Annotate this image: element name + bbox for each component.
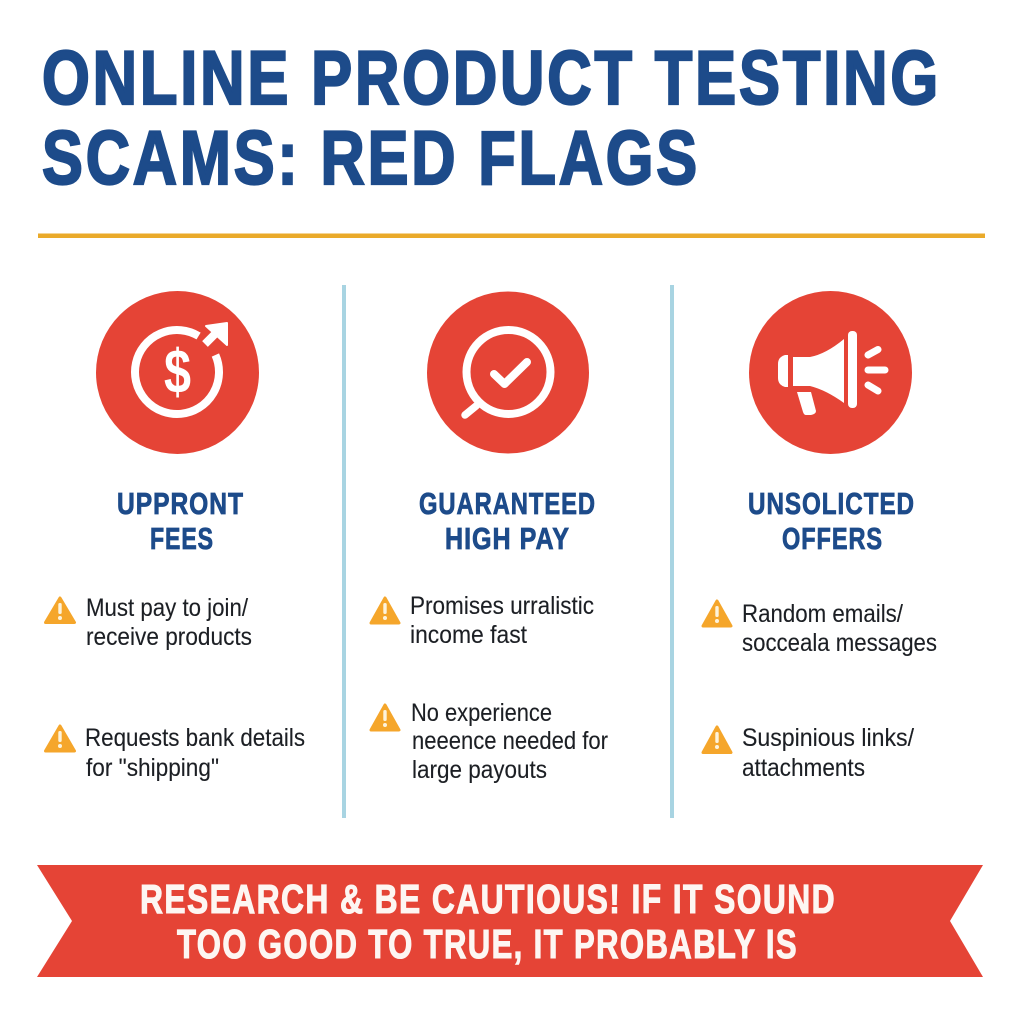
icon: megaphone <box>749 291 912 454</box>
warning item: no experience: neeence needed for <box>412 727 608 755</box>
warning item: no experience: large payouts <box>412 756 547 784</box>
warning item: must pay <box>46 594 252 651</box>
icon: dollar with growth arrow: $ <box>164 338 191 407</box>
panel: guaranteed high pay <box>371 292 608 784</box>
icon: dollar with growth arrow <box>96 291 259 454</box>
heading <box>748 487 915 556</box>
warning item: random emails: socceala messages <box>742 629 937 657</box>
heading: UNSOLICTED <box>748 487 915 521</box>
warning item: unrealistic income: Promises urralistic <box>410 592 594 620</box>
warning item: no experience: No experience <box>411 699 552 727</box>
warning item: suspicious links <box>703 724 914 782</box>
heading: OFFERS <box>782 522 883 556</box>
warning item: must pay: Must pay to join/ <box>86 594 248 622</box>
callout banner <box>37 865 983 977</box>
callout banner: RESEARCH & BE CAUTIOUS! IF IT SOUND <box>140 876 836 922</box>
heading: UPPRONT <box>117 487 244 521</box>
warning item: unrealistic income <box>371 592 594 649</box>
warning item: random emails <box>703 600 937 657</box>
heading <box>117 487 244 556</box>
title: SCAMS: RED FLAGS <box>42 116 700 201</box>
warning item: unrealistic income: income fast <box>410 621 527 649</box>
warning item: no experience <box>371 699 608 784</box>
warning item: must pay: receive products <box>86 623 252 651</box>
title <box>42 36 941 201</box>
warning item: bank details <box>46 724 305 782</box>
panel: upfront fees <box>46 291 305 782</box>
warning item: bank details: for "shipping" <box>86 754 219 782</box>
icon: magnifier with check <box>427 292 589 454</box>
heading <box>419 487 596 556</box>
warning item: suspicious links: Suspinious links/ <box>742 724 914 752</box>
callout banner: TOO GOOD TO TRUE, IT PROBABLY IS <box>177 921 798 967</box>
heading: FEES <box>150 522 214 556</box>
panel: unsolicited offers <box>703 291 937 782</box>
warning item: suspicious links: attachments <box>742 754 865 782</box>
warning item: bank details: Requests bank details <box>85 724 305 752</box>
warning item: random emails: Random emails/ <box>742 600 903 628</box>
heading: HIGH PAY <box>445 522 570 556</box>
heading: GUARANTEED <box>419 487 596 521</box>
